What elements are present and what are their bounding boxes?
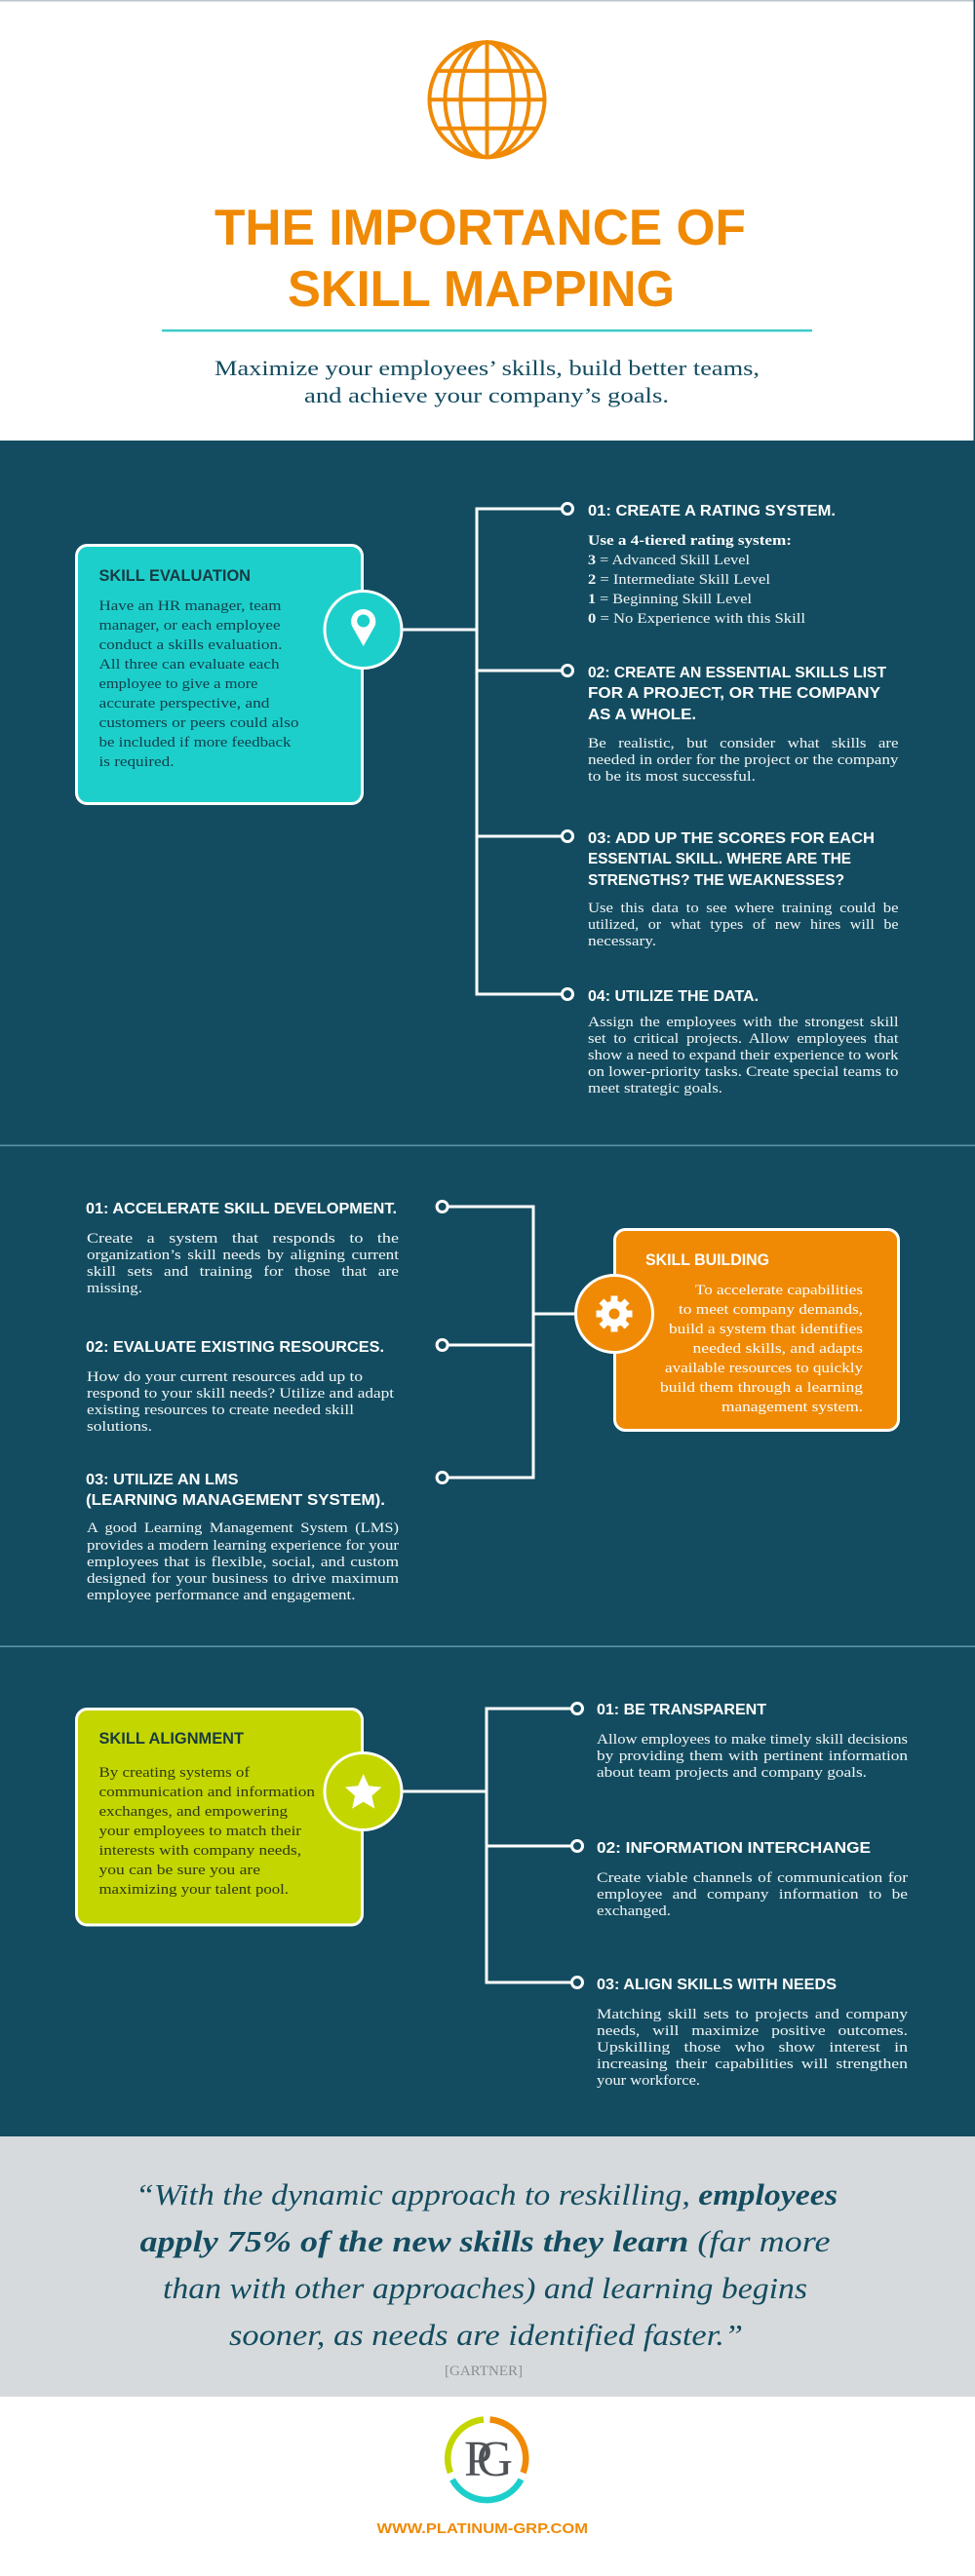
step 03: utilize an lms: employees that is flexible, social, and custom <box>87 1555 400 1570</box>
quote text: apply 75% of the new skills they learn (far more <box>140 2224 831 2258</box>
step 02: evaluate existing resources: respond to your skill needs? Utilize and adapt <box>87 1386 394 1402</box>
website url: WWW.PLATINUM-GRP.COM <box>376 2520 588 2537</box>
step 04: utilize the data: show a need to expand their experience to work <box>588 1048 899 1063</box>
step 03: align skills with needs: your workforce. <box>597 2073 700 2089</box>
step 01: rating system: 3 = Advanced Skill Level <box>588 553 750 568</box>
subtitle: and achieve your company’s goals. <box>304 383 669 407</box>
subtitle <box>214 356 760 407</box>
icon: star <box>325 1752 402 1830</box>
card: skill alignment: By creating systems of <box>99 1765 250 1781</box>
step 03: add up the scores: STRENGTHS? THE WEAKNESSES? <box>588 872 844 889</box>
step 02: essential skills list: FOR A PROJECT, OR THE COMPANY <box>588 685 880 702</box>
step 04: utilize the data: 04: UTILIZE THE DATA. <box>588 988 759 1005</box>
step 03: add up the scores <box>588 830 899 949</box>
step 03: align skills with needs <box>597 1977 909 2089</box>
step 02: essential skills list <box>588 665 899 785</box>
quote text: “With the dynamic approach to reskilling, employees <box>136 2177 838 2211</box>
card: skill building: SKILL BUILDING <box>645 1250 769 1269</box>
step 04: utilize the data: on lower-priority tasks. Create special teams to <box>588 1064 899 1080</box>
step 02: information interchange <box>597 1840 908 1919</box>
step 02: evaluate existing resources: 02: EVALUATE EXISTING RESOURCES. <box>86 1339 384 1356</box>
step 03: add up the scores: necessary. <box>588 934 656 949</box>
card: skill alignment: exchanges, and empowering <box>99 1804 289 1820</box>
step 01: rating system: 2 = Intermediate Skill Level <box>588 572 770 588</box>
card: skill building: build a system that identifies <box>669 1322 863 1337</box>
quote text: than with other approaches) and learning begins <box>163 2271 807 2305</box>
title underline <box>162 329 812 331</box>
card: skill building: to meet company demands, <box>679 1302 863 1318</box>
icon: gear <box>575 1275 653 1353</box>
step 01: accelerate skill development: Create a system that responds to the <box>87 1231 399 1247</box>
connector tree <box>402 503 573 1000</box>
step 03: utilize an lms: (LEARNING MANAGEMENT SYSTEM). <box>86 1492 385 1509</box>
card: skill alignment <box>76 1710 363 1925</box>
card: skill evaluation: Have an HR manager, team <box>99 598 282 614</box>
icon: globe <box>429 42 544 157</box>
step 04: utilize the data: Assign the employees with the strongest skill <box>588 1015 899 1030</box>
quote source: [GARTNER] <box>445 2364 523 2379</box>
icon: location pin <box>325 591 402 669</box>
step 02: information interchange: Create viable channels of communication for <box>597 1870 908 1886</box>
step 03: add up the scores: 03: ADD UP THE SCORES FOR EACH <box>588 830 875 847</box>
step 01: accelerate skill development: missing. <box>87 1281 142 1296</box>
step 02: essential skills list: Be realistic, but consider what skills are <box>588 736 899 751</box>
step 01: accelerate skill development <box>86 1201 399 1296</box>
step 03: align skills with needs: increasing their capabilities will strengthen <box>597 2057 909 2072</box>
panel: skill building <box>86 1201 899 1603</box>
quote text <box>136 2177 838 2352</box>
title <box>214 200 746 318</box>
subtitle: Maximize your employees’ skills, build better teams, <box>214 356 760 380</box>
card: skill evaluation: be included if more feedback <box>99 735 292 750</box>
step 02: evaluate existing resources <box>86 1339 394 1435</box>
step 03: add up the scores: Use this data to see where training could be <box>588 901 899 916</box>
step 01: be transparent: about team projects and company goals. <box>597 1765 867 1781</box>
step 01: accelerate skill development: 01: ACCELERATE SKILL DEVELOPMENT. <box>86 1201 397 1217</box>
step 03: align skills with needs: needs, will maximize positive outcomes. <box>597 2023 908 2039</box>
card: skill building: management system. <box>722 1400 863 1415</box>
card: skill evaluation: accurate perspective, and <box>99 696 270 711</box>
step 01: rating system: 0 = No Experience with this Skill <box>588 611 805 627</box>
step 01: be transparent: 01: BE TRANSPARENT <box>597 1702 766 1718</box>
title: SKILL MAPPING <box>288 261 675 318</box>
panel: skill evaluation <box>76 503 899 1096</box>
step 01: be transparent: by providing them with pertinent information <box>597 1749 909 1764</box>
card: skill alignment: SKILL ALIGNMENT <box>99 1729 245 1748</box>
step 02: essential skills list: to be its most successful. <box>588 769 756 785</box>
card: skill alignment: your employees to match their <box>99 1824 301 1839</box>
logo <box>448 2419 526 2500</box>
logo: G <box>477 2432 513 2487</box>
step 04: utilize the data: meet strategic goals. <box>588 1081 722 1096</box>
card: skill evaluation: is required. <box>99 754 174 770</box>
step 02: information interchange: exchanged. <box>597 1903 671 1919</box>
step 02: essential skills list: AS A WHOLE. <box>588 707 696 723</box>
connector tree <box>437 1201 577 1483</box>
step 01: rating system <box>588 503 836 627</box>
step 02: evaluate existing resources: How do your current resources add up to <box>87 1369 363 1385</box>
step 01: rating system: Use a 4-tiered rating system: <box>588 533 792 549</box>
step 01: rating system: 01: CREATE A RATING SYSTEM. <box>588 503 836 519</box>
step 03: align skills with needs: Upskilling those who show interest in <box>597 2040 909 2056</box>
card: skill building: needed skills, and adapts <box>692 1341 863 1357</box>
card: skill alignment: interests with company needs, <box>99 1843 301 1859</box>
step 03: utilize an lms <box>86 1472 400 1603</box>
card: skill evaluation: manager, or each employee <box>99 618 281 634</box>
step 03: add up the scores: utilized, or what types of new hires will be <box>588 917 899 933</box>
card: skill evaluation: employee to give a more <box>99 676 258 692</box>
step 02: essential skills list: 02: CREATE AN ESSENTIAL SKILLS LIST <box>588 665 886 681</box>
step 02: information interchange: employee and company information to be <box>597 1887 908 1903</box>
title: THE IMPORTANCE OF <box>214 200 746 256</box>
step 03: utilize an lms: 03: UTILIZE AN LMS <box>86 1472 239 1488</box>
logo: P <box>464 2432 492 2487</box>
card: skill alignment: communication and information <box>99 1785 316 1800</box>
step 03: utilize an lms: designed for your business to drive maximum <box>87 1571 400 1587</box>
step 01: rating system: 1 = Beginning Skill Level <box>588 592 752 607</box>
step 03: align skills with needs: Matching skill sets to projects and company <box>597 2007 909 2022</box>
card: skill building: To accelerate capabilities <box>695 1283 863 1298</box>
step 03: align skills with needs: 03: ALIGN SKILLS WITH NEEDS <box>597 1977 837 1993</box>
quote text: sooner, as needs are identified faster.” <box>229 2318 743 2352</box>
step 02: evaluate existing resources: solutions. <box>87 1419 152 1435</box>
card: skill evaluation: All three can evaluate each <box>99 657 280 673</box>
step 03: utilize an lms: employee performance and engagement. <box>87 1588 355 1603</box>
step 03: add up the scores: ESSENTIAL SKILL. WHERE ARE THE <box>588 851 851 867</box>
step 04: utilize the data: set to critical projects. Allow employees that <box>588 1031 899 1047</box>
card: skill building <box>614 1230 899 1431</box>
card: skill alignment: maximizing your talent pool. <box>99 1882 289 1898</box>
step 04: utilize the data <box>588 988 899 1096</box>
step 01: be transparent <box>597 1702 909 1781</box>
step 02: evaluate existing resources: existing resources to create needed skill <box>87 1403 354 1418</box>
step 02: information interchange: 02: INFORMATION INTERCHANGE <box>597 1840 871 1857</box>
step 01: accelerate skill development: skill sets and training for those that are <box>87 1264 399 1280</box>
card: skill building: build them through a learning <box>660 1380 864 1396</box>
step 01: be transparent: Allow employees to make timely skill decisions <box>597 1732 908 1748</box>
card: skill evaluation <box>76 546 363 803</box>
connector tree <box>402 1704 583 1988</box>
panel: skill alignment <box>76 1702 909 2089</box>
step 01: accelerate skill development: organization’s skill needs by aligning current <box>87 1248 399 1263</box>
panel: quote <box>0 2136 975 2397</box>
card: skill evaluation: customers or peers could also <box>99 715 298 731</box>
step 03: utilize an lms: provides a modern learning experience for your <box>87 1538 399 1554</box>
card: skill alignment: you can be sure you are <box>99 1863 260 1878</box>
step 02: essential skills list: needed in order for the project or the company <box>588 752 899 768</box>
step 03: utilize an lms: A good Learning Management System (LMS) <box>87 1520 399 1536</box>
dark background band <box>0 441 975 2136</box>
card: skill evaluation: conduct a skills evaluation. <box>99 637 283 653</box>
card: skill building: available resources to quickly <box>665 1361 864 1376</box>
card: skill evaluation: SKILL EVALUATION <box>99 566 251 585</box>
